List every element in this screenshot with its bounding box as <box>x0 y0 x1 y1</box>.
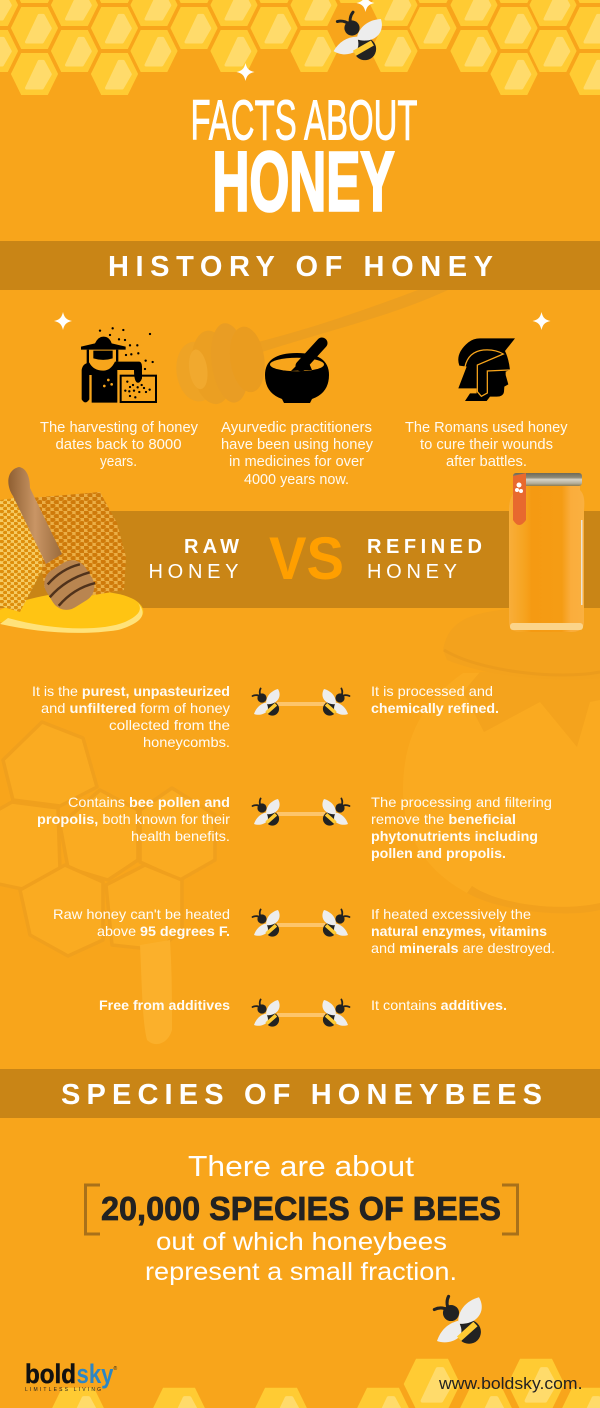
text: romans fact <box>405 419 568 470</box>
watercolor honeycomb and drip <box>0 722 215 1044</box>
logo: boldsky: ® <box>114 1365 118 1372</box>
text: harvesting fact: years. <box>100 453 137 470</box>
species statement: There are about <box>188 1151 414 1183</box>
title: HONEY <box>212 135 394 229</box>
honeycomb pattern: top <box>0 0 600 95</box>
species statement: out of which honeybees <box>156 1228 447 1256</box>
photo: honeycomb with dipper <box>0 467 143 633</box>
refined honey text 1: chemically refined. <box>371 700 499 716</box>
band: raw vs refined: REFINED <box>367 536 482 558</box>
refined honey text 2 <box>371 794 552 861</box>
watercolor honey dipper <box>171 290 448 410</box>
raw honey text 4: Free from additives <box>99 997 230 1013</box>
text: ayurvedic fact <box>221 419 373 488</box>
refined honey text 3: natural enzymes, vitamins <box>371 923 547 939</box>
band: raw vs refined: VS <box>269 525 344 592</box>
text: harvesting fact: The harvesting of honey <box>40 419 198 436</box>
raw honey text 1: and unfiltered form of honey <box>41 700 230 716</box>
refined honey text 1 <box>371 683 499 716</box>
raw honey text 2: propolis, both known for their <box>37 811 230 827</box>
band: raw vs refined <box>0 511 600 608</box>
row 1: connector bees <box>252 688 350 716</box>
species statement <box>86 1151 518 1286</box>
raw honey text 2: Contains bee pollen and <box>68 794 230 810</box>
title: FACTS ABOUT <box>190 89 418 153</box>
band: history of honey <box>0 241 600 290</box>
row 3: connector bees <box>252 910 350 937</box>
text: ayurvedic fact: in medicines for over <box>229 453 364 470</box>
raw honey text 1: honeycombs. <box>143 734 230 750</box>
watercolor jar <box>403 608 600 913</box>
logo: boldsky: bold <box>25 1359 76 1389</box>
band: species of honeybees <box>0 1069 600 1118</box>
band: history of honey: HISTORY OF HONEY <box>108 251 493 283</box>
species statement: represent a small fraction. <box>145 1258 457 1286</box>
icon: sparkle top right <box>356 0 374 12</box>
band: species of honeybees: SPECIES OF HONEYBEES <box>61 1079 542 1111</box>
text: harvesting fact: dates back to 8000 <box>56 436 182 453</box>
raw honey text 3: above 95 degrees F. <box>97 923 230 939</box>
icon: sparkle left <box>54 312 72 330</box>
refined honey text 3: and minerals are destroyed. <box>371 940 555 956</box>
raw honey text 1: It is the purest, unpasteurized <box>32 683 230 699</box>
title <box>190 89 418 229</box>
logo: boldsky: sky <box>76 1359 114 1389</box>
raw honey text 2 <box>37 794 230 844</box>
photo: honey jar <box>509 473 584 632</box>
row 2: connector bees <box>252 798 350 826</box>
refined honey text 3 <box>371 906 555 956</box>
text: ayurvedic fact: Ayurvedic practitioners <box>221 419 372 436</box>
raw honey text 3: Raw honey can't be heated <box>53 906 230 922</box>
band: raw vs refined: HONEY <box>367 561 457 583</box>
icon: sparkle top left <box>236 63 254 81</box>
raw honey text 2: health benefits. <box>131 828 230 844</box>
refined honey text 1: It is processed and <box>371 683 493 699</box>
logo: boldsky: LIMITLESS LIVING <box>25 1387 101 1393</box>
text: romans fact: after battles. <box>446 453 527 470</box>
refined honey text 2: pollen and propolis. <box>371 845 506 861</box>
band: raw vs refined: HONEY <box>148 561 238 583</box>
honeycomb pattern: bottom <box>50 1359 600 1408</box>
raw honey text 1: collected from the <box>109 717 230 733</box>
icon: bee bottom <box>434 1296 482 1344</box>
refined honey text 2: remove the beneficial <box>371 811 516 827</box>
refined honey text 2: phytonutrients including <box>371 828 538 844</box>
icon: mortar and pestle <box>265 343 329 403</box>
icon: roman helmet <box>458 338 515 401</box>
raw honey text 3 <box>53 906 230 939</box>
text: harvesting fact <box>40 419 198 470</box>
text: romans fact: to cure their wounds <box>420 436 553 453</box>
icon: beekeeper <box>81 327 156 403</box>
band: raw vs refined: RAW <box>184 536 239 558</box>
row 4: connector bees <box>252 1000 350 1027</box>
logo: boldsky <box>25 1359 118 1393</box>
refined honey text 4: It contains additives. <box>371 997 507 1013</box>
text: romans fact: The Romans used honey <box>405 419 568 436</box>
icon: bee top <box>331 9 384 62</box>
website url: www.boldsky.com. <box>438 1374 582 1393</box>
icon: sparkle right <box>532 312 550 330</box>
species statement: 20,000 SPECIES OF BEES <box>101 1190 501 1227</box>
raw honey text 1 <box>32 683 230 750</box>
refined honey text 3: If heated excessively the <box>371 906 531 922</box>
refined honey text 2: The processing and filtering <box>371 794 552 810</box>
text: ayurvedic fact: have been using honey <box>221 436 373 453</box>
text: ayurvedic fact: 4000 years now. <box>244 471 349 488</box>
